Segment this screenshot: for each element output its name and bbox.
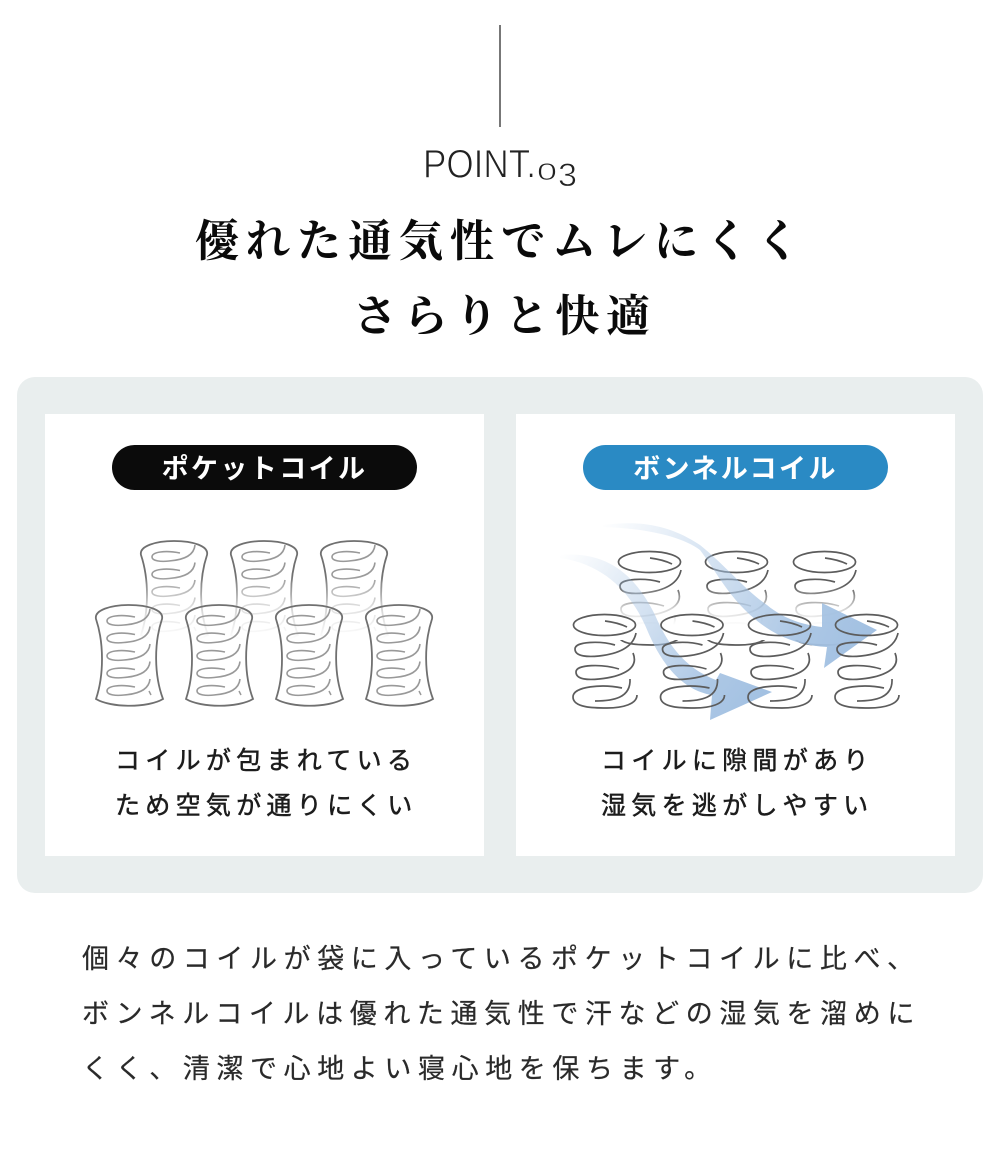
eyebrow: POINT.03: 0 — [537, 159, 557, 186]
pocket coils: front row — [96, 605, 433, 706]
label: bonnell coil pill — [583, 445, 888, 490]
label: pocket coil pill: ポケットコイル — [162, 454, 367, 484]
title line 1: 優れた通気性でムレにくく — [195, 217, 807, 266]
caption: pocket coil line 2: ため空気が通りにくい — [115, 792, 418, 820]
panel: pocket coil — [45, 414, 484, 856]
pocket coils: back row — [130, 541, 400, 645]
eyebrow: POINT.03: 3 — [558, 157, 577, 192]
caption: pocket coil line 1: コイルが包まれている — [115, 747, 417, 775]
caption: bonnell coil line 1: コイルに隙間があり — [601, 747, 874, 775]
bonnell coils: back row — [610, 552, 870, 645]
panel: bonnell coil — [516, 414, 955, 856]
vertical divider line — [499, 25, 500, 127]
title line 2: さらりと快適 — [353, 292, 657, 341]
label: pocket coil pill — [112, 445, 417, 490]
body text line 3: くく、清潔で心地よい寝心地を保ちます。 — [82, 1054, 718, 1084]
body text line 2: ボンネルコイルは優れた通気性で汗などの湿気を溜めに — [82, 999, 921, 1029]
label: bonnell coil pill: ボンネルコイル — [633, 454, 838, 484]
panel: comparison background — [17, 377, 983, 893]
eyebrow: POINT.03: POINT. — [423, 142, 536, 186]
arrow: airflow upper — [603, 523, 877, 668]
illustration: pocket coils and bonnell coils with airflow arrows — [94, 524, 900, 720]
bonnell coils: front row — [573, 614, 899, 708]
arrow: airflow lower — [560, 555, 772, 720]
body text line 1: 個々のコイルが袋に入っているポケットコイルに比べ、 — [82, 944, 921, 974]
caption: bonnell coil line 2: 湿気を逃がしやすい — [601, 792, 873, 820]
